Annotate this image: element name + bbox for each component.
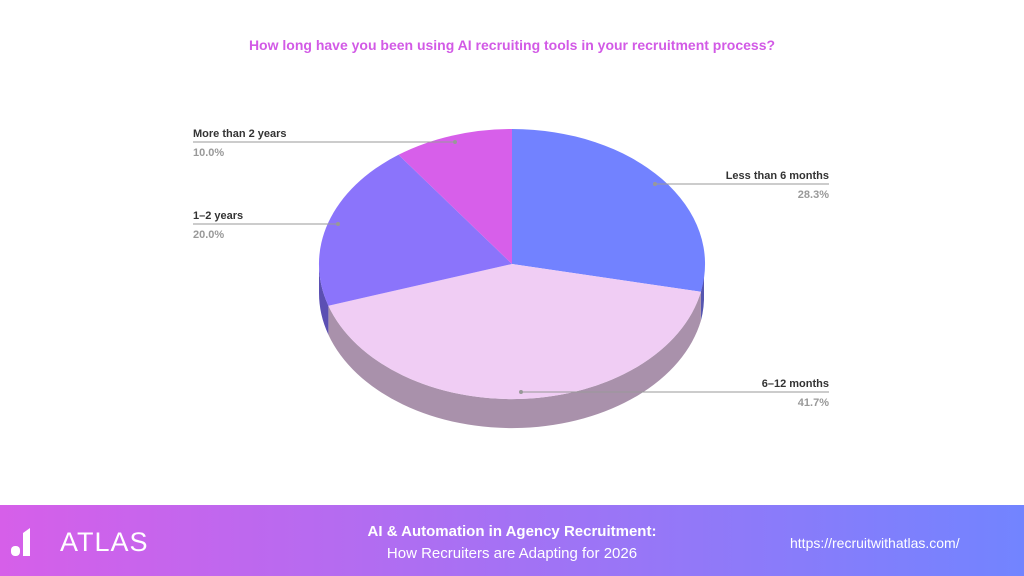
slice: more than 2 years <box>398 129 512 264</box>
label: 6-12 months <box>762 378 829 409</box>
pie side walls <box>319 264 704 428</box>
title: How long have you been using AI recruiting tools in your recruitment process? <box>249 37 775 53</box>
footer title <box>368 523 656 562</box>
label: 1-2 years: 20.0% <box>193 229 224 241</box>
logo <box>11 527 149 557</box>
label: more than 2 years: More than 2 years <box>193 128 287 140</box>
label: 6-12 months: 41.7% <box>798 397 829 409</box>
label: less than 6 months: Less than 6 months <box>726 170 829 182</box>
logo: ATLAS <box>60 527 149 557</box>
footer title: How Recruiters are Adapting for 2026 <box>387 545 637 562</box>
label: 1-2 years: 1–2 years <box>193 210 243 222</box>
label: 6-12 months: 6–12 months <box>762 378 829 390</box>
url: https://recruitwithatlas.com/ <box>790 535 960 551</box>
label: more than 2 years <box>193 128 287 159</box>
label: more than 2 years: 10.0% <box>193 147 224 159</box>
label: less than 6 months <box>726 170 829 201</box>
label: less than 6 months: 28.3% <box>798 189 829 201</box>
slice: 1-2 years <box>319 155 512 306</box>
label: 1-2 years <box>193 210 243 241</box>
footer title: AI & Automation in Agency Recruitment: <box>368 523 656 540</box>
slice: less than 6 months <box>512 129 705 292</box>
slice: 6-12 months <box>328 264 701 399</box>
footer <box>0 505 1024 576</box>
leader lines <box>193 140 829 394</box>
